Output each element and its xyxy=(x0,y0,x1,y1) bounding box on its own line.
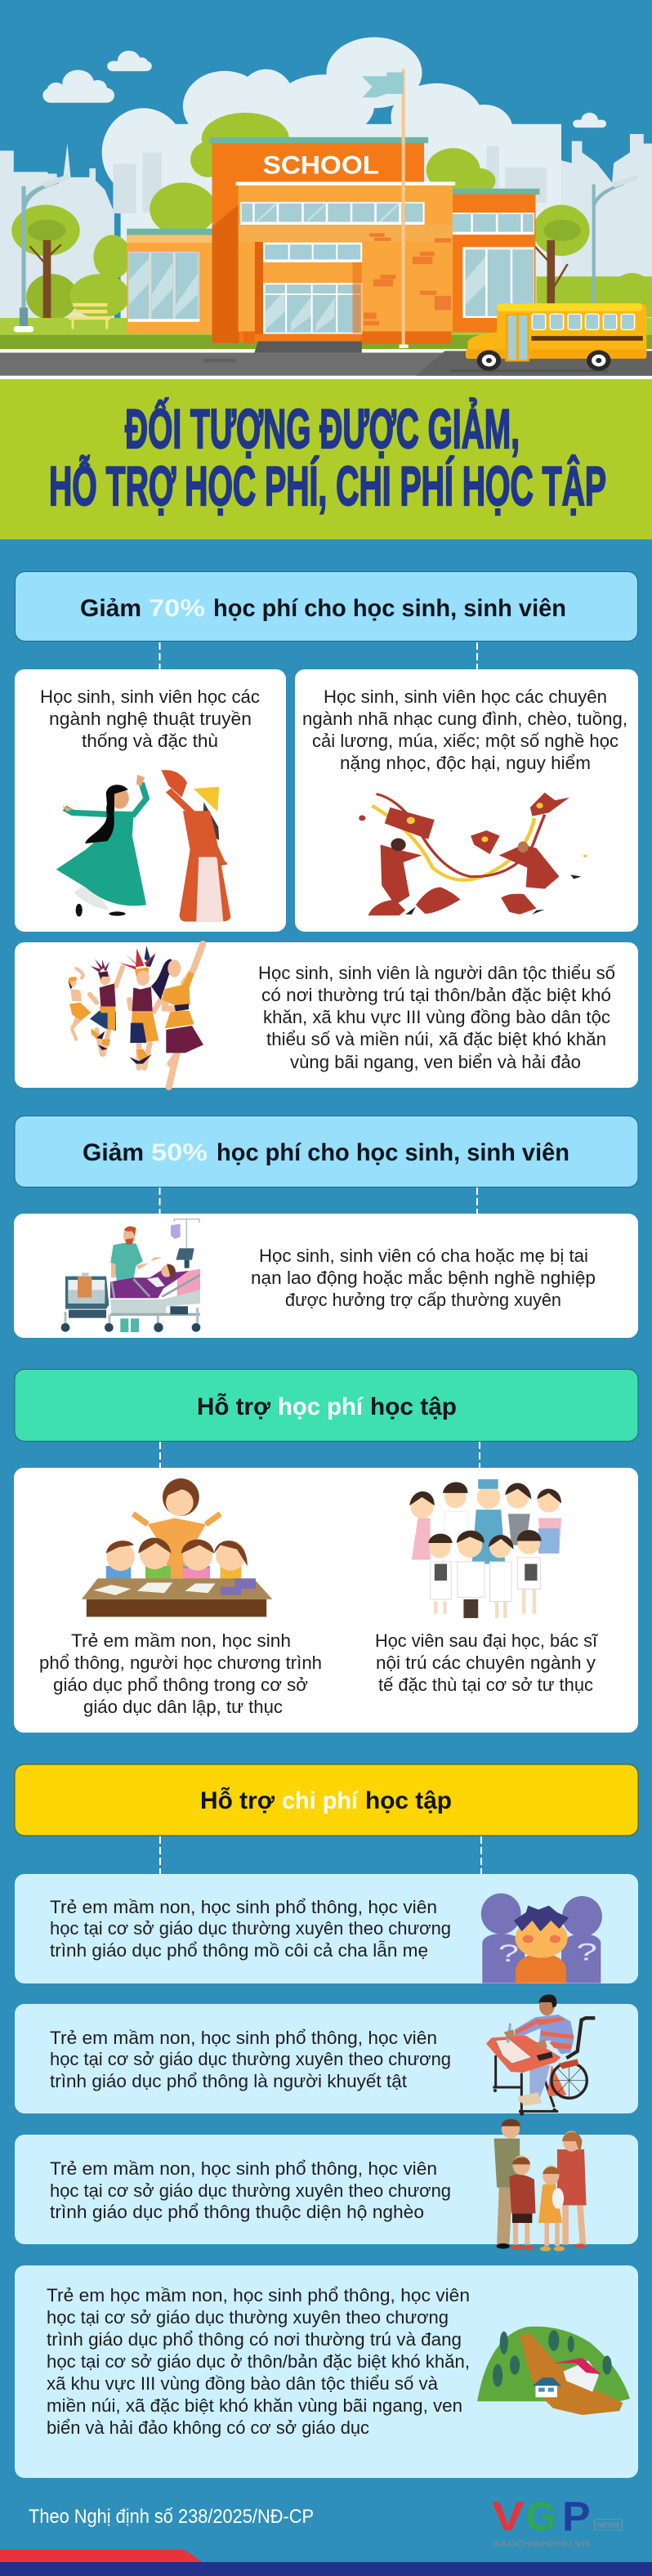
illustration: ao dai dancers xyxy=(56,770,230,922)
text block: ngành nhã nhạc cung đình, chèo, tuồng, xyxy=(302,709,627,729)
bench xyxy=(69,303,110,329)
main tower xyxy=(212,143,424,342)
text block: vùng bãi ngang, ven biển và hải đảo xyxy=(290,1052,581,1072)
text block: có nơi thường trú tại thôn/bản đặc biệt khó xyxy=(261,985,611,1005)
header: hỗ trợ chi phí: chi phí xyxy=(282,1787,359,1814)
text block: Trẻ em mầm non, học sinh phổ thông, học viên xyxy=(50,1897,437,1917)
text block: học viên sau đại học: Học viên sau đại học, bác sĩ xyxy=(375,1630,598,1651)
text block xyxy=(50,2028,451,2091)
header: hỗ trợ học phí: học tập xyxy=(370,1393,457,1420)
text block xyxy=(50,1897,451,1961)
text block: trẻ em mầm non xyxy=(39,1630,322,1717)
header: giảm 50% xyxy=(15,1116,638,1187)
skyline xyxy=(0,144,114,319)
logo: VGP news: NEWS xyxy=(597,2522,620,2529)
text block: khăn, xã khu vực III vùng đồng bào dân tộc xyxy=(263,1007,610,1027)
header: hỗ trợ chi phí: Hỗ trợ xyxy=(200,1787,275,1814)
text block: nạn lao động hoặc mắc bệnh nghề nghiệp xyxy=(251,1268,596,1288)
text block: học tại cơ sở giáo dục thường xuyên theo chương xyxy=(47,2307,449,2328)
illustration: poor family xyxy=(494,2119,587,2252)
text block: trình giáo dục phổ thông có nơi thường trú và đang xyxy=(47,2329,462,2350)
text block xyxy=(40,686,260,751)
panel: hộ nghèo xyxy=(15,2119,638,2252)
illustration: landslide xyxy=(477,2327,630,2415)
footer bars xyxy=(0,2550,652,2576)
header: giảm 70%: Giảm xyxy=(80,595,141,622)
text block: trẻ em mầm non: phổ thông, người học chương trình xyxy=(39,1652,322,1673)
illustration: wheelchair student xyxy=(486,1995,595,2116)
bushes xyxy=(26,113,652,320)
header: giảm 50%: 50% xyxy=(151,1139,208,1166)
entrance xyxy=(263,243,362,262)
illustration: flag dancers xyxy=(359,793,587,915)
text block: Học sinh, sinh viên là người dân tộc thiểu số xyxy=(258,963,615,983)
text block: trẻ em mầm non: giáo dục dân lập, tư thục xyxy=(83,1697,283,1717)
header: giảm 70%: học phí cho học sinh, sinh viên xyxy=(213,595,566,622)
logo: VGP news xyxy=(492,2493,622,2548)
illustration: orphan child: ? xyxy=(498,1940,519,1967)
illustration: hospital bed xyxy=(61,1219,200,1332)
header: giảm 70% xyxy=(15,572,637,641)
left wing xyxy=(127,229,212,235)
text block: Trẻ em mầm non, học sinh phổ thông, học viên xyxy=(50,2158,437,2179)
text block: học tại cơ sở giáo dục thường xuyên theo chương xyxy=(50,2180,451,2201)
ground and road xyxy=(0,318,652,336)
illustration: orphan child: ? xyxy=(576,1939,597,1966)
text block xyxy=(302,686,627,773)
source note: Theo Nghị định số 238/2025/NĐ-CP xyxy=(29,2506,314,2528)
panel: cha mẹ tai nạn lao động xyxy=(14,1214,638,1338)
illustration: school building scene xyxy=(0,0,652,379)
trees xyxy=(11,205,590,256)
header: hỗ trợ chi phí: học tập xyxy=(365,1787,452,1814)
text block: học tại cơ sở giáo dục thường xuyên theo chương xyxy=(50,2049,451,2069)
text block xyxy=(251,1246,596,1310)
text block: cải lương, múa, xiếc; một số nghề học xyxy=(312,731,619,751)
header: hỗ trợ học phí xyxy=(15,1370,638,1442)
text block: ngành nghệ thuật truyền xyxy=(49,709,252,729)
text block xyxy=(47,2285,470,2438)
text block: nặng nhọc, độc hại, nguy hiểm xyxy=(340,753,591,773)
text block: trình giáo dục phổ thông là người khuyết tật xyxy=(50,2071,407,2091)
panel: dân tộc thiểu số xyxy=(15,942,638,1088)
text block: học viên sau đại học: tế đặc thù tại cơ sở tư thục xyxy=(378,1675,593,1695)
text block: biển và hải đảo không có cơ sở giáo dục xyxy=(47,2417,369,2438)
header: hỗ trợ học phí: Hỗ trợ xyxy=(197,1393,271,1420)
text block: học tại cơ sở giáo dục thường xuyên theo chương xyxy=(50,1918,451,1939)
logo: VGP news: BAOCHINHPHU.VN xyxy=(492,2539,590,2548)
illustration: doctors group xyxy=(409,1479,561,1618)
big cloud xyxy=(102,38,561,319)
panel: nghệ thuật truyền thống xyxy=(15,669,286,932)
lamp posts xyxy=(21,181,59,308)
text block: thống và đặc thù xyxy=(82,731,218,751)
text block: xã khu vực III vùng đồng bào dân tộc thiểu số và xyxy=(47,2373,439,2394)
bricks xyxy=(364,233,451,325)
school bus xyxy=(450,303,646,372)
panel: hỗ trợ học phí cards xyxy=(14,1468,638,1733)
SCHOOL sign: SCHOOL xyxy=(263,151,379,180)
title text xyxy=(49,397,606,517)
header: giảm 70%: 70% xyxy=(149,595,205,622)
title band xyxy=(0,379,652,539)
illustration: teacher and children xyxy=(82,1478,272,1617)
logo: VGP news: P xyxy=(562,2493,591,2539)
right wing xyxy=(453,189,540,195)
header: hỗ trợ học phí: học phí xyxy=(278,1393,364,1420)
text block: trình giáo dục phổ thông thuộc diện hộ nghèo xyxy=(50,2202,424,2222)
logo: VGP news: V xyxy=(492,2493,525,2539)
text block xyxy=(258,963,615,1072)
illustration: ethnic dancers xyxy=(68,944,203,1087)
text block: trẻ em mầm non: Trẻ em mầm non, học sinh xyxy=(71,1630,291,1651)
logo: VGP news: G xyxy=(526,2493,556,2539)
text block: thiểu số và miền núi, xã đặc biệt khó khăn xyxy=(266,1029,606,1049)
text block: Học sinh, sinh viên có cha hoặc mẹ bị tai xyxy=(259,1246,588,1266)
text block: miền núi, xã đặc biệt khó khăn vùng bãi ngang, ven xyxy=(47,2395,462,2416)
panel: vùng đặc biệt khó khăn xyxy=(15,2265,638,2478)
text block: Trẻ em học mầm non, học sinh phổ thông, học viên xyxy=(47,2285,470,2305)
illustration: orphan child xyxy=(481,1894,602,1983)
header: hỗ trợ chi phí xyxy=(15,1764,638,1836)
panel: nhã nhạc, chèo, tuồng xyxy=(295,669,638,932)
text block: Trẻ em mầm non, học sinh phổ thông, học viên xyxy=(50,2028,437,2048)
text block: học viên sau đại học xyxy=(375,1630,598,1695)
text block: được hưởng trợ cấp thường xuyên xyxy=(285,1290,561,1310)
text block xyxy=(50,2158,451,2222)
panel: khuyết tật xyxy=(15,1995,638,2116)
panel: mồ côi xyxy=(15,1874,638,1983)
text block: trình giáo dục phổ thông mồ côi cả cha lẫn mẹ xyxy=(50,1940,428,1961)
header: giảm 50%: Giảm xyxy=(83,1139,144,1166)
text block: Học sinh, sinh viên học các xyxy=(40,686,260,707)
text block: học viên sau đại học: nội trú các chuyên ngành y xyxy=(376,1652,596,1673)
header: giảm 50%: học phí cho học sinh, sinh viên xyxy=(217,1139,569,1166)
text block: Học sinh, sinh viên học các chuyên xyxy=(324,686,607,707)
text block: học tại cơ sở giáo dục ở thôn/bản đặc biệt khó khăn, xyxy=(47,2351,470,2372)
text block: trẻ em mầm non: giáo dục phổ thông trong cơ sở xyxy=(53,1675,308,1695)
upper window strip xyxy=(240,202,425,225)
flag pole xyxy=(402,69,405,347)
